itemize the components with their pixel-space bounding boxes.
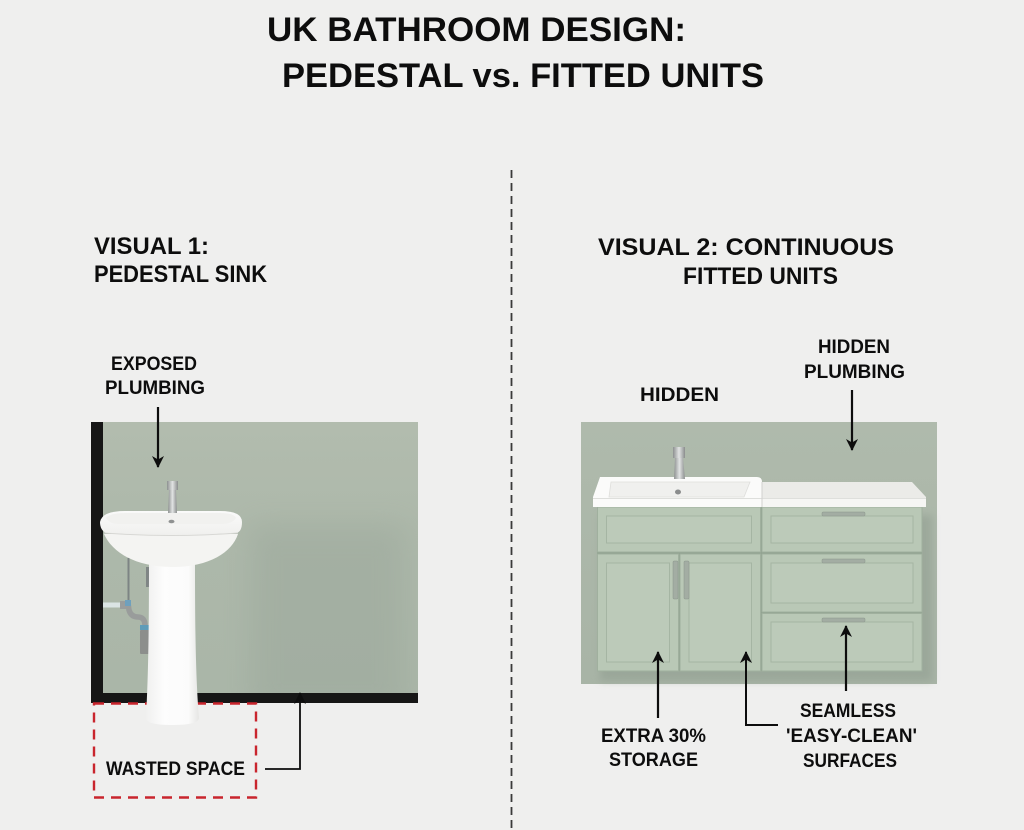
left door bbox=[598, 554, 678, 671]
wasted space box bbox=[94, 704, 256, 798]
arrow: to plumbing bbox=[157, 407, 159, 467]
middle drawer bbox=[762, 554, 922, 612]
label: hidden plumbing bbox=[804, 337, 905, 383]
arrow: extra storage right bbox=[746, 652, 778, 725]
heading: visual 2 bbox=[598, 234, 894, 290]
top right drawer bbox=[762, 507, 922, 552]
top left drawer bbox=[598, 507, 760, 552]
tap bbox=[673, 447, 685, 479]
label: seamless surfaces: SEAMLESS bbox=[800, 701, 896, 722]
wall bbox=[581, 422, 937, 684]
heading: visual 2: VISUAL 2: CONTINUOUS bbox=[598, 234, 894, 261]
label: seamless surfaces bbox=[786, 701, 917, 772]
label: seamless surfaces: 'EASY-CLEAN' bbox=[786, 726, 917, 747]
panel: fitted units bbox=[581, 234, 937, 772]
heading: visual 2: FITTED UNITS bbox=[683, 263, 838, 290]
heading: visual 1: VISUAL 1: bbox=[94, 233, 209, 260]
title: PEDESTAL vs. FITTED UNITS bbox=[282, 57, 764, 95]
title: UK BATHROOM DESIGN: bbox=[267, 11, 686, 49]
tap bbox=[167, 481, 178, 513]
arrow: wasted space bbox=[265, 693, 300, 769]
label: wasted space: WASTED SPACE bbox=[106, 759, 245, 780]
heading: visual 1: PEDESTAL SINK bbox=[94, 261, 268, 288]
panel: pedestal sink bbox=[91, 233, 418, 798]
heading: visual 1 bbox=[94, 233, 268, 288]
label: extra storage: EXTRA 30% bbox=[601, 726, 706, 747]
label: exposed plumbing: EXPOSED bbox=[111, 354, 197, 375]
label: exposed plumbing bbox=[105, 354, 205, 399]
arrow: to hidden plumbing bbox=[851, 390, 853, 450]
title bbox=[267, 11, 764, 95]
arrow: extra storage left bbox=[657, 652, 659, 718]
label: hidden plumbing: PLUMBING bbox=[804, 362, 905, 383]
label: hidden: HIDDEN bbox=[640, 385, 719, 406]
pedestal bbox=[146, 560, 199, 725]
exposed pipes bbox=[103, 558, 150, 654]
countertop and basin bbox=[593, 477, 926, 507]
wall with black edge bbox=[91, 422, 418, 715]
arrow: seamless surfaces bbox=[845, 626, 847, 691]
handles bbox=[673, 512, 865, 622]
label: seamless surfaces: SURFACES bbox=[803, 751, 897, 772]
label: exposed plumbing: PLUMBING bbox=[105, 378, 205, 399]
bottom drawer bbox=[762, 614, 922, 671]
basin bbox=[100, 511, 242, 567]
label: hidden plumbing: HIDDEN bbox=[818, 337, 890, 358]
vanity cabinet bbox=[597, 507, 922, 671]
right door bbox=[680, 554, 760, 671]
label: extra storage: STORAGE bbox=[609, 750, 698, 771]
label: extra storage bbox=[601, 726, 706, 771]
